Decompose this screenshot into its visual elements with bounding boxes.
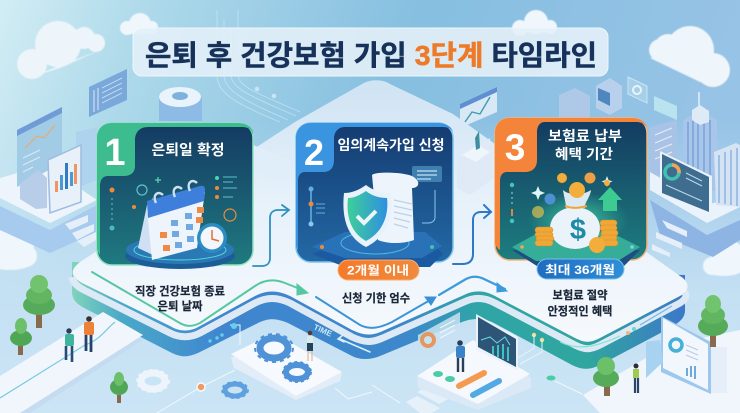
icon: speech bubble bbox=[412, 166, 442, 182]
small city behind title bbox=[559, 77, 647, 120]
building: center tower bbox=[683, 92, 717, 192]
white column behind board bbox=[710, 347, 727, 393]
gear: white bbox=[137, 370, 169, 392]
tree: small left bbox=[10, 318, 32, 355]
person: green shirt bbox=[65, 328, 74, 362]
tree: bottom bbox=[110, 372, 128, 403]
badge: 2개월 이내: 2개월 이내 bbox=[347, 262, 409, 278]
tree: large right bbox=[698, 295, 728, 347]
central dashboard island bbox=[417, 312, 531, 410]
circuit lines behind title bbox=[217, 10, 300, 122]
stepping slabs bbox=[406, 386, 450, 413]
stairs bbox=[652, 220, 687, 257]
icon: money bag bbox=[550, 190, 600, 249]
tower behind bbox=[76, 127, 97, 188]
gear on cylinder top bbox=[159, 87, 202, 121]
card 2 bbox=[296, 123, 453, 305]
timeline arrows on platform bbox=[92, 205, 507, 352]
monitor bbox=[660, 151, 712, 215]
card 2 podium bbox=[312, 232, 443, 267]
person: standing bbox=[307, 331, 313, 361]
building: left bbox=[650, 120, 677, 185]
bar chart card bbox=[48, 145, 81, 213]
TIME label: TIME bbox=[312, 323, 334, 339]
tree: small right bbox=[593, 357, 619, 396]
icon: coins bbox=[532, 172, 618, 253]
card 3 orange tab bbox=[495, 118, 647, 250]
gears on small platform bbox=[231, 331, 342, 400]
right city platform bbox=[650, 92, 740, 257]
folder panel bbox=[646, 340, 663, 378]
connector 1 to 2 bbox=[253, 210, 287, 266]
person: green top bbox=[633, 364, 639, 393]
blue route middle bbox=[316, 297, 432, 328]
small server box bbox=[20, 170, 47, 209]
card 3: 혜택 기간 bbox=[555, 146, 613, 162]
cloud: right edge bbox=[703, 240, 740, 276]
card 1 bbox=[97, 123, 253, 313]
card 3 podium bbox=[512, 192, 640, 268]
node: teal with line bbox=[546, 376, 582, 394]
card 3 caption: 보험료 절약 bbox=[552, 288, 608, 302]
icon: up arrow bbox=[598, 187, 622, 211]
gear: large blue bbox=[255, 334, 293, 362]
stairs bbox=[65, 215, 96, 247]
side connector nodes bbox=[518, 306, 672, 364]
card 1 heading: 은퇴일 확정 bbox=[152, 142, 224, 159]
number 3: 3 bbox=[505, 127, 525, 168]
icon: shield bbox=[343, 185, 392, 247]
building: right bbox=[714, 143, 740, 207]
number 1: 1 bbox=[104, 132, 126, 174]
card 3 deco bbox=[510, 176, 612, 223]
main platform side bbox=[72, 262, 685, 369]
gear: small blue ground bbox=[222, 382, 248, 398]
number 2: 2 bbox=[304, 132, 324, 173]
cloud: lower left bbox=[0, 225, 37, 270]
badge: 2개월 이내 bbox=[338, 260, 419, 280]
ground circuit bbox=[157, 325, 400, 413]
floating blue panel bbox=[89, 69, 127, 117]
top surface rim bbox=[72, 277, 686, 349]
center-right dashboard panel bbox=[460, 87, 497, 128]
card 1 podium bbox=[125, 236, 235, 269]
bottom right island bbox=[583, 295, 740, 413]
arrow on side bbox=[338, 335, 370, 352]
flat block mid left bbox=[253, 145, 290, 180]
main platform top surface bbox=[73, 80, 688, 342]
left isometric platform with charts bbox=[0, 69, 127, 253]
card 1 deco bbox=[110, 176, 237, 230]
cloud: behind title right bbox=[512, 10, 557, 36]
card 1 caption: 직장 건강보험 종료 bbox=[135, 284, 225, 298]
card 2 caption: 신청 기한 엄수 bbox=[342, 291, 410, 305]
cloud: behind title left bbox=[120, 13, 158, 35]
card 3 heading: 보험료 납부 bbox=[548, 128, 622, 144]
badge: 최대 36개월 bbox=[537, 259, 624, 279]
report board bbox=[661, 316, 711, 394]
icon: document bbox=[372, 173, 418, 243]
person: orange shirt bbox=[84, 316, 94, 352]
floating note bbox=[654, 96, 677, 120]
icon: money bag: $ bbox=[570, 214, 586, 246]
monitor bbox=[476, 314, 518, 370]
floating pie panel bbox=[418, 312, 460, 358]
title bar bbox=[133, 28, 608, 76]
green route bbox=[92, 272, 305, 326]
tree: large left bbox=[23, 275, 55, 328]
card 3: 안정적인 혜택 bbox=[548, 305, 612, 318]
walkway lower left bbox=[0, 312, 143, 413]
card 1: 은퇴 날짜 bbox=[158, 300, 203, 313]
floating chart panel bbox=[17, 107, 62, 187]
cloud: top left bbox=[17, 21, 105, 79]
person: blue shirt bbox=[456, 340, 465, 372]
card 1 green tab bbox=[97, 123, 253, 255]
icon: clock bbox=[197, 223, 227, 253]
node: orange bbox=[197, 383, 205, 391]
card 2 blue tab bbox=[296, 123, 453, 250]
card 2 heading: 임의계속가입 신청 bbox=[338, 137, 444, 153]
side dots bbox=[208, 323, 237, 343]
cloud: top right bbox=[649, 26, 730, 87]
blue route right bbox=[439, 277, 505, 295]
icon: calendar bbox=[138, 181, 205, 260]
gear: small blue bbox=[283, 362, 311, 382]
upper right isometric block bbox=[457, 131, 494, 195]
card 2 deco bbox=[308, 186, 435, 226]
card 3 bbox=[495, 118, 647, 318]
title text: 은퇴 후 건강보험 가입 3단계 타임라인 bbox=[145, 40, 597, 71]
badge: 최대 36개월: 최대 36개월 bbox=[545, 262, 615, 277]
connector 2 to 3 bbox=[453, 212, 489, 264]
